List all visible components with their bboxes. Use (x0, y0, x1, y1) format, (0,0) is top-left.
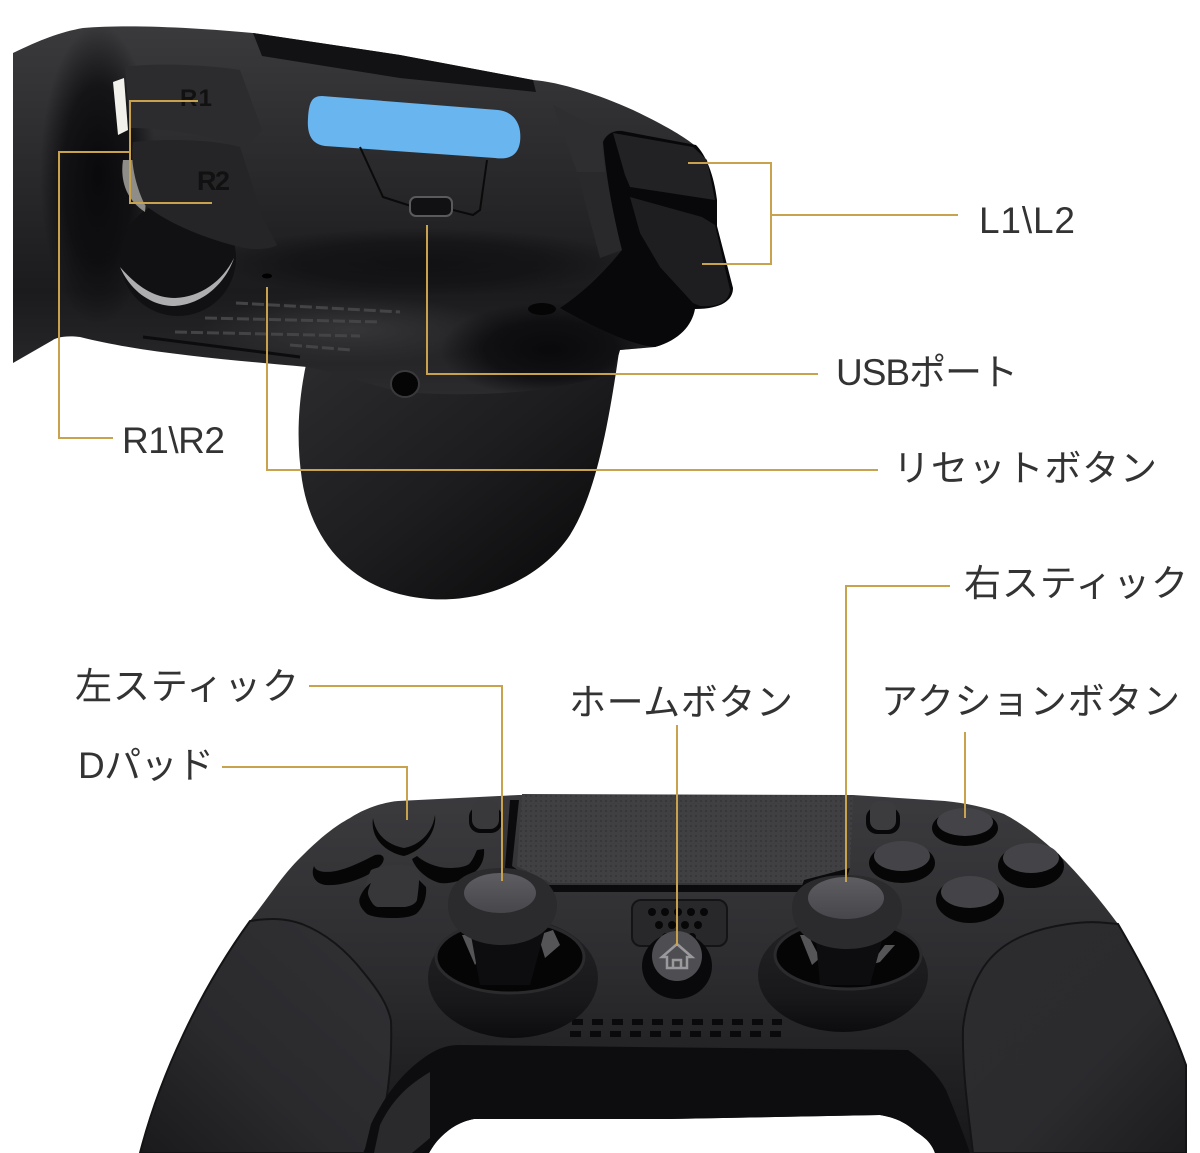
options button (866, 801, 900, 834)
callout: L1\L2 (688, 163, 1075, 264)
controller body (140, 795, 1186, 1153)
left analog stick and ring (120, 200, 236, 316)
body shading (40, 25, 660, 398)
callout: R1\R2 (59, 101, 225, 461)
R2 mark: R2 (197, 166, 230, 196)
left stick (428, 868, 598, 1038)
lower black trim (364, 1045, 970, 1153)
home button (642, 931, 712, 999)
bottom jack (391, 371, 419, 397)
D-pad down (359, 865, 426, 918)
light bar (308, 96, 520, 158)
lower grille (570, 1022, 786, 1034)
right grip (963, 922, 1186, 1153)
callout: R1\R2: R1\R2 (122, 420, 225, 461)
top controller photo (13, 25, 733, 599)
callout: USBポート: USBポート (836, 352, 1018, 393)
speaker grille (632, 900, 727, 946)
right shoulder buttons R1 R2 (113, 65, 277, 249)
R1 mark: R1 (180, 85, 212, 112)
callout: 左スティック: 左スティック (75, 666, 299, 707)
action buttons (869, 808, 1064, 923)
left shoulder buttons L1 L2 (613, 133, 730, 306)
callout: リセットボタン (267, 287, 1157, 489)
top edge plate (253, 33, 536, 92)
D-pad left (313, 855, 384, 885)
grip of top controller (299, 345, 620, 599)
callout: 右スティック: 右スティック (964, 563, 1188, 604)
share button (469, 800, 502, 833)
callout: 左スティック (75, 666, 502, 881)
touchpad (517, 794, 853, 883)
top controller body (13, 26, 730, 394)
black gap beside shoulder buttons (560, 131, 733, 347)
D-pad (313, 815, 484, 918)
callout: USBポート (427, 225, 1018, 393)
label sticker (143, 303, 400, 357)
D-pad up (373, 815, 435, 856)
side strip (553, 105, 605, 172)
callout: Dパッド (78, 745, 407, 820)
callout: アクションボタン: アクションボタン (881, 681, 1180, 722)
left grip (140, 919, 391, 1153)
D-pad right (412, 849, 484, 883)
USB port (360, 147, 487, 216)
bottom controller photo (140, 794, 1186, 1153)
small side hole (528, 303, 556, 315)
callout: 右スティック (846, 563, 1188, 882)
callout: Dパッド: Dパッド (78, 745, 214, 786)
callout: ホームボタン: ホームボタン (569, 682, 793, 723)
grey trim strip (374, 1072, 430, 1153)
callout: L1\L2: L1\L2 (979, 200, 1075, 241)
reset hole (262, 274, 272, 278)
callout: リセットボタン: リセットボタン (893, 448, 1157, 489)
touchpad shadow (505, 800, 850, 892)
right stick (758, 875, 928, 1032)
